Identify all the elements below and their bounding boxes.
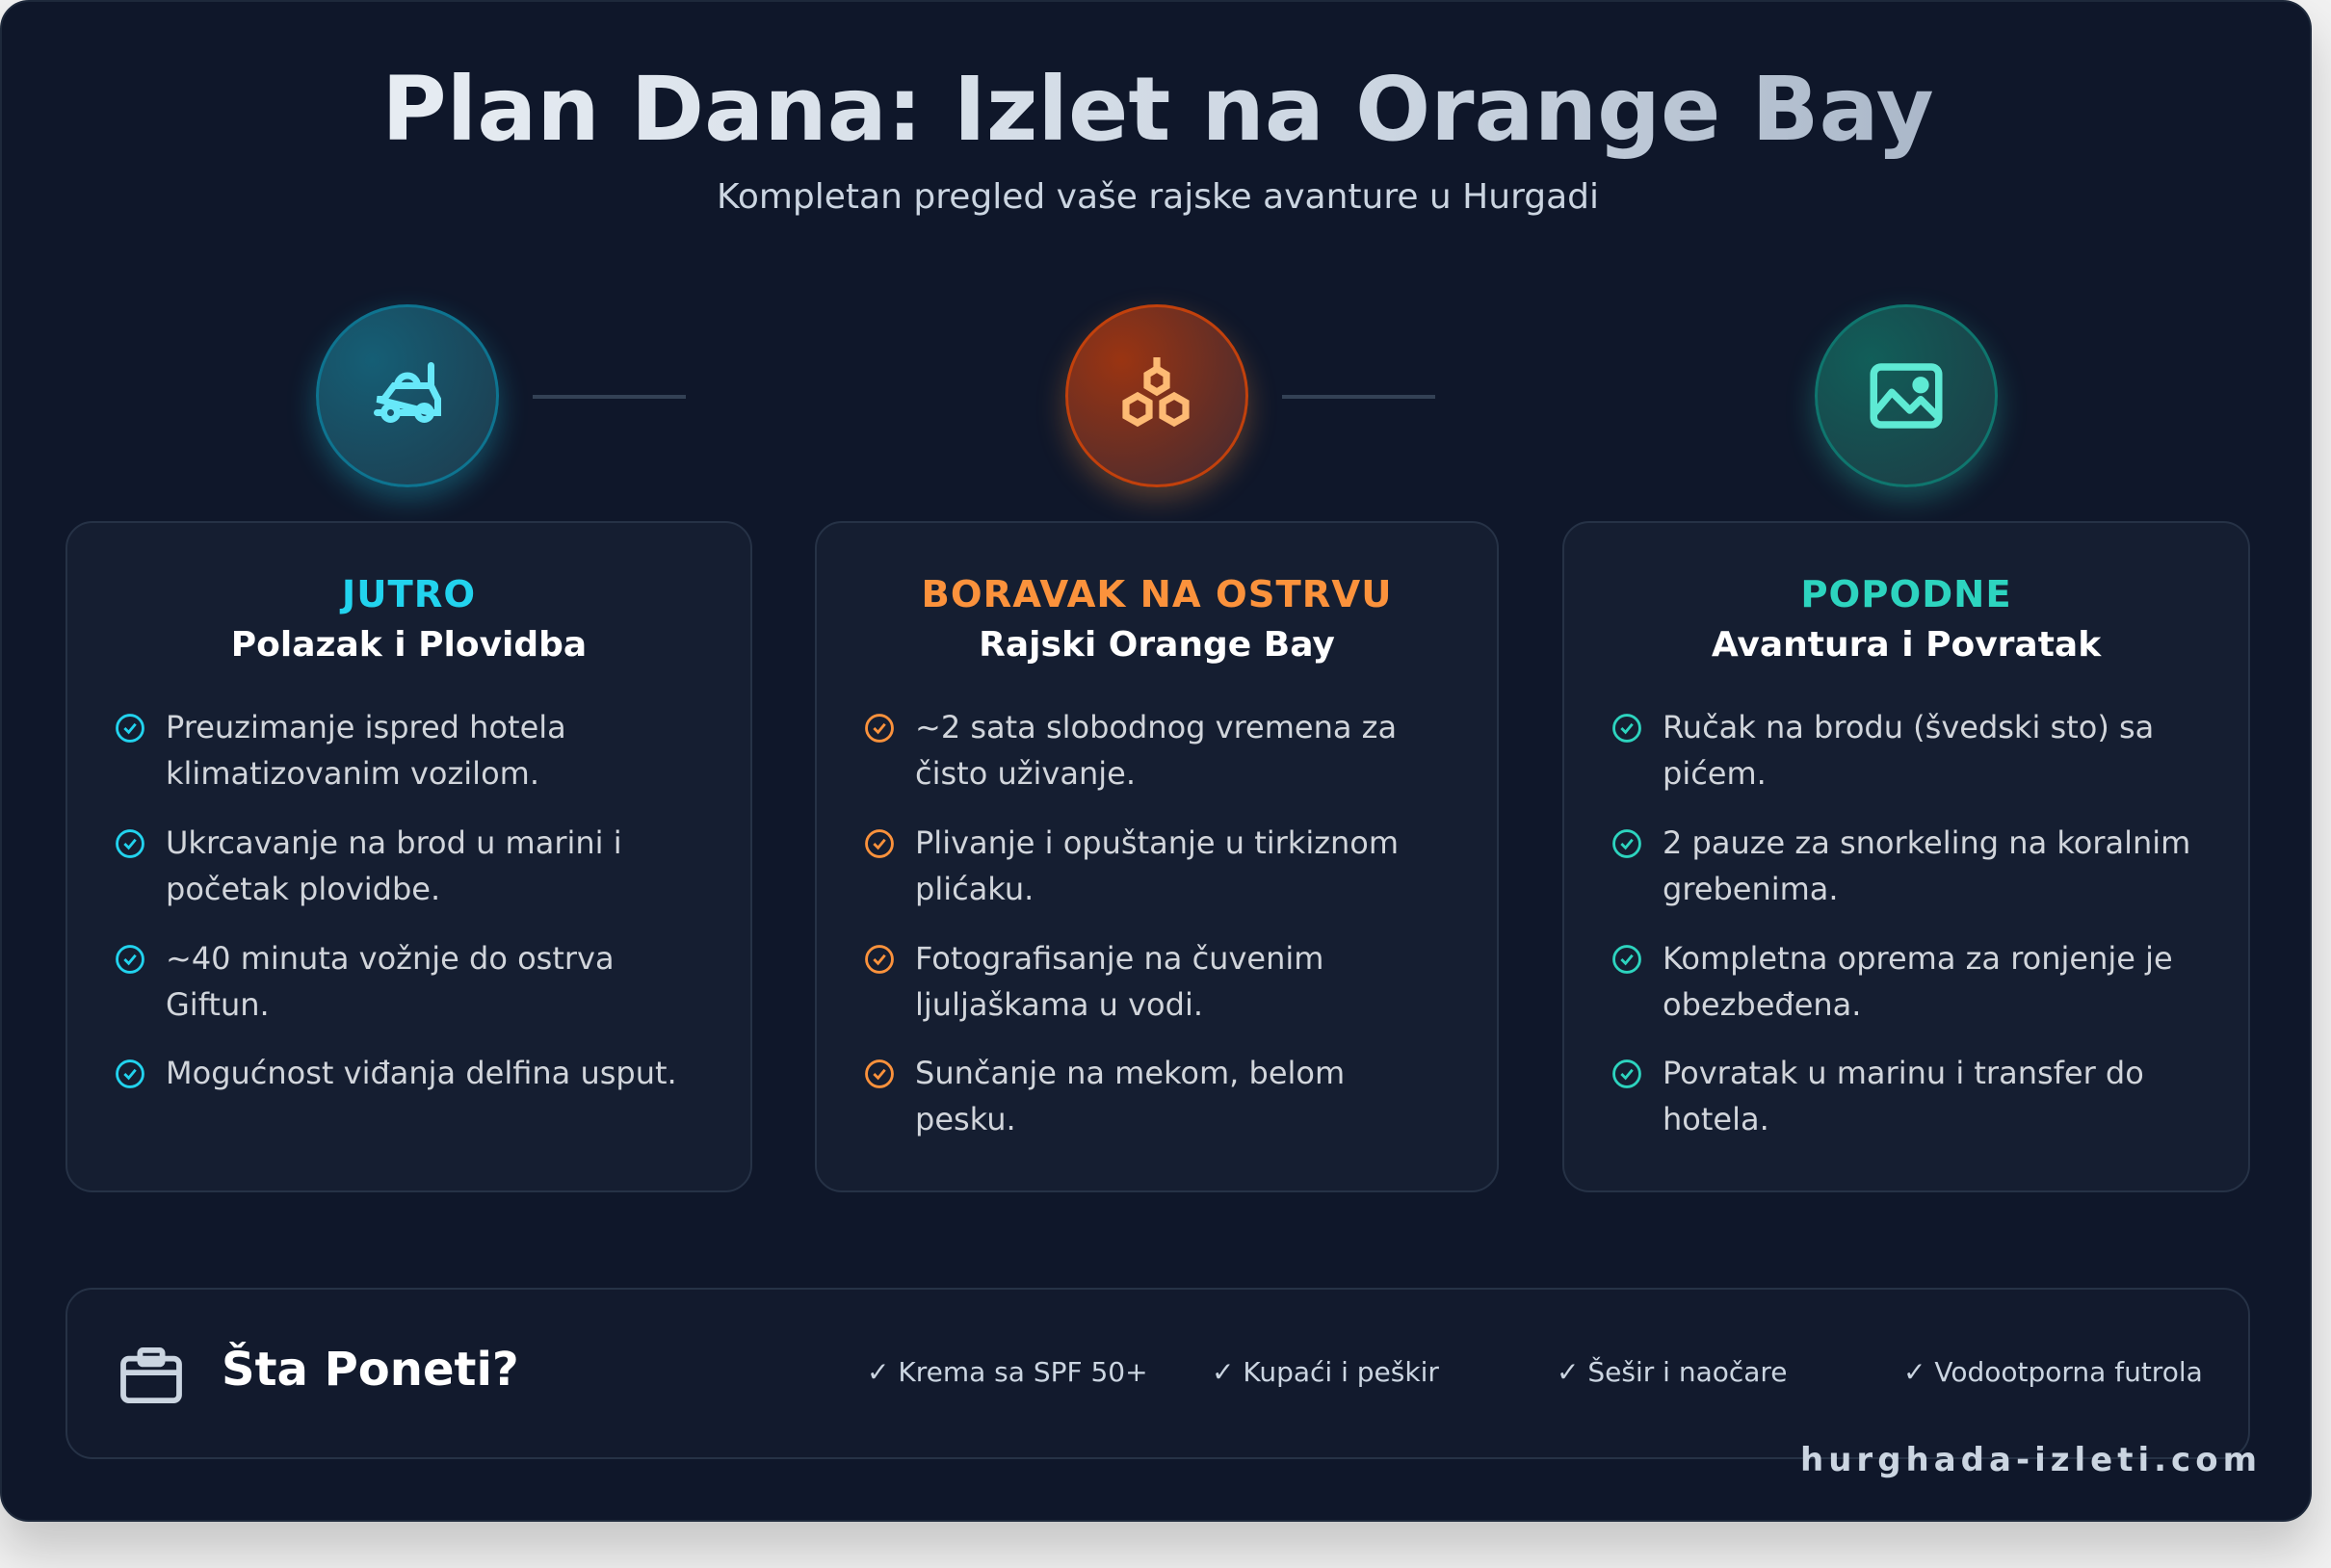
- heading: JUTRO: [342, 573, 476, 616]
- item: 2 pauze za snorkeling na koralnim grebenima.: [1663, 824, 2190, 907]
- item: ✓ Kupaći i peškir: [1212, 1356, 1439, 1388]
- icon: bag: [120, 1347, 182, 1403]
- panel: afternoon: [1562, 521, 2250, 1192]
- item: Plivanje i opuštanje u tirkiznom plićaku.: [915, 824, 1399, 907]
- heading: BORAVAK NA OSTRVU: [922, 573, 1392, 616]
- item: ~2 sata slobodnog vremena za čisto uživanje.: [915, 709, 1397, 792]
- icon: car (morning): [316, 304, 499, 487]
- subheading: Avantura i Povratak: [1712, 625, 2101, 665]
- item: Fotografisanje na čuvenim ljuljaškama u vodi.: [915, 940, 1323, 1023]
- subheading: Rajski Orange Bay: [979, 625, 1335, 665]
- subheading: Polazak i Plovidba: [231, 625, 587, 665]
- icon: image (afternoon): [1815, 304, 1998, 487]
- heading: Šta Poneti?: [222, 1343, 519, 1397]
- watermark: hurghada-izleti.com: [1800, 1441, 2262, 1479]
- panel: morning: [65, 521, 752, 1192]
- panel: island: [815, 521, 1499, 1192]
- title: [2, 58, 2314, 161]
- connector 2: [1282, 395, 1435, 399]
- item: ~40 minuta vožnje do ostrva Giftun.: [166, 940, 615, 1023]
- item: Ručak na brodu (švedski sto) sa pićem.: [1663, 709, 2154, 792]
- subtitle: Kompletan pregled vaše rajske avanture u Hurgadi: [717, 177, 1599, 217]
- connector 1: [533, 395, 686, 399]
- title: Plan Dana: Izlet na Orange Bay: [381, 58, 1934, 161]
- item: Preuzimanje ispred hotela klimatizovanim vozilom.: [166, 709, 566, 792]
- icon: hexagons (island): [1065, 304, 1248, 487]
- item: ✓ Šešir i naočare: [1557, 1356, 1788, 1388]
- item: Kompletna oprema za ronjenje je obezbeđena.: [1663, 940, 2173, 1023]
- item: ✓ Vodootporna futrola: [1903, 1356, 2203, 1388]
- item: Mogućnost viđanja delfina usput.: [166, 1055, 677, 1091]
- item: Sunčanje na mekom, belom pesku.: [915, 1055, 1345, 1137]
- panel: what to bring: [65, 1288, 2250, 1459]
- item: Povratak u marinu i transfer do hotela.: [1663, 1055, 2144, 1137]
- item: Ukrcavanje na brod u marini i početak plovidbe.: [166, 824, 622, 907]
- item: ✓ Krema sa SPF 50+: [867, 1356, 1148, 1388]
- heading: POPODNE: [1800, 573, 2012, 616]
